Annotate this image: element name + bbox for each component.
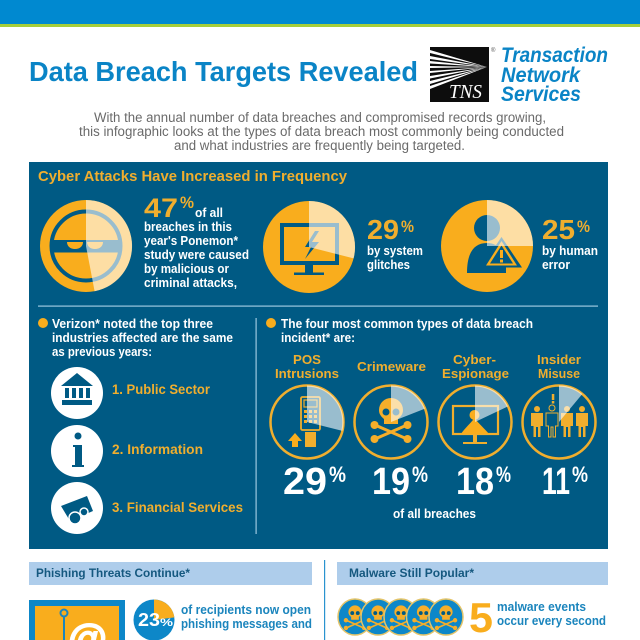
- label: public sector: 1. Public Sector: [112, 382, 211, 397]
- label: information: 2. Information: [112, 442, 203, 457]
- stat: 25 percent: %: [577, 217, 590, 236]
- icon: financial cart: [51, 482, 103, 534]
- TNS logo: TNS: [449, 81, 482, 103]
- text: phishing stat: of recipients now open: [181, 603, 311, 617]
- text: four types of incident: The four most common types of data breach: [281, 317, 533, 331]
- text: phishing stat: phishing messages and: [181, 617, 312, 631]
- stat: 19 percent crimeware: 19: [372, 461, 410, 503]
- intro text: With the annual number of data breaches and compromised records growing,: [94, 110, 546, 125]
- text: malware stat: malware events: [497, 600, 586, 614]
- column label: POS intrusions: [275, 352, 339, 381]
- text: Verizon note: industries affected are the same: [52, 331, 233, 345]
- panel: malware: [337, 562, 608, 640]
- pie: system glitches 29% with monitor icon: [263, 201, 355, 293]
- intro text: this infographic looks at the types of data breach most commonly being conducted: [79, 124, 564, 139]
- column label: cyber-espionage: Cyber-: [453, 352, 496, 367]
- TNS logo: ®: [491, 47, 496, 54]
- column label: cyber-espionage: [442, 352, 509, 381]
- stat: 29 percent: 29: [367, 214, 399, 245]
- column label: cyber-espionage: Espionage: [442, 366, 509, 381]
- stat: 47 percent: criminal attacks,: [144, 276, 237, 290]
- TNS logo: Network: [501, 64, 581, 87]
- TNS logo: [430, 44, 608, 106]
- stat: 29 percent POS: %: [329, 462, 346, 487]
- text: four types of incident: [266, 317, 533, 345]
- stat: 25 percent: 25: [542, 214, 575, 245]
- text: Verizon note: Verizon* noted the top three: [52, 317, 213, 331]
- icon: information: [51, 425, 103, 477]
- stat: 18 percent espionage: %: [496, 462, 511, 487]
- column label: insider misuse: Insider: [537, 352, 581, 367]
- stat: 29 percent POS: 29: [283, 461, 327, 503]
- TNS logo: Transaction: [501, 44, 608, 67]
- icon: five skull medallions: [338, 599, 463, 635]
- column label: insider misuse: [537, 352, 581, 381]
- stat: 11 percent insider: 11: [542, 461, 570, 503]
- stat: 47 percent: study were caused: [144, 248, 249, 262]
- stat: 47 percent: 47: [144, 193, 178, 223]
- stat: 29 percent POS: [283, 461, 346, 503]
- pie: 23 percent open phishing: 23: [138, 610, 160, 630]
- text: Verizon note: as previous years:: [52, 345, 152, 359]
- stat: 47 percent: %: [180, 193, 194, 212]
- panel heading: Cyber Attacks Have Increased in Frequency: [38, 168, 348, 185]
- chart: insider misuse 11%: [522, 386, 596, 458]
- chart: crimeware 19%: [354, 386, 428, 458]
- stat: 47 percent: of all: [195, 206, 223, 220]
- stat: 47 percent: by malicious or: [144, 262, 229, 276]
- pie: 23 percent open phishing: %: [160, 617, 173, 629]
- stat: 29 percent: [367, 214, 423, 272]
- column label: POS intrusions: POS: [293, 352, 321, 367]
- phishing header: Phishing Threats Continue*: [36, 566, 190, 580]
- stat: 29 percent: %: [401, 217, 414, 236]
- stat: 47 percent: breaches in this: [144, 220, 232, 234]
- pie: 23 percent open phishing: [134, 600, 174, 640]
- panel: phishing threats: [29, 562, 312, 640]
- text: malware stat: [497, 600, 606, 628]
- TNS logo: Services: [501, 83, 581, 106]
- stat: 11 percent insider: %: [572, 462, 588, 487]
- column label: crimeware: Crimeware: [357, 359, 426, 374]
- text: four types of incident: incident* are:: [281, 331, 355, 345]
- icon: public sector building: [51, 367, 103, 419]
- malware header: Malware Still Popular*: [349, 566, 474, 580]
- label: financial services: 3. Financial Services: [112, 500, 243, 515]
- intro text: and what industries are frequently being targeted.: [174, 138, 465, 153]
- stat: 5 malware events: 5: [469, 594, 493, 640]
- phishing header: [29, 562, 312, 585]
- stat: 19 percent crimeware: %: [412, 462, 428, 487]
- panel: cyber attacks: [29, 162, 608, 549]
- malware header: [337, 562, 608, 585]
- pie: malicious attacks 47% with masked face icon: [40, 200, 132, 292]
- stat: 47 percent: [144, 193, 249, 290]
- intro text: [79, 110, 564, 153]
- stat: 25 percent: [542, 214, 598, 272]
- text: phishing stat: [181, 603, 312, 631]
- chart: cyber-espionage 18%: [438, 386, 512, 458]
- text: Verizon note: [38, 317, 233, 359]
- stat: 29 percent: glitches: [367, 258, 410, 272]
- icon: phishing hook: [29, 600, 125, 640]
- text: malware stat: occur every second: [497, 614, 606, 628]
- top banner: [0, 0, 640, 27]
- stat: 29 percent: by system: [367, 244, 423, 258]
- stat: 25 percent: error: [542, 258, 570, 272]
- stat: 25 percent: by human: [542, 244, 598, 258]
- title: Data Breach Targets Revealed: [29, 56, 418, 87]
- column label: insider misuse: Misuse: [538, 366, 580, 381]
- chart: POS intrusions 29%: [270, 385, 344, 458]
- caption: of all breaches: of all breaches: [393, 507, 476, 521]
- stat: 47 percent: year's Ponemon*: [144, 234, 238, 248]
- pie: human error 25% with person and warning icon: [441, 200, 533, 292]
- stat: 18 percent espionage: 18: [456, 461, 494, 503]
- column label: POS intrusions: Intrusions: [275, 366, 339, 381]
